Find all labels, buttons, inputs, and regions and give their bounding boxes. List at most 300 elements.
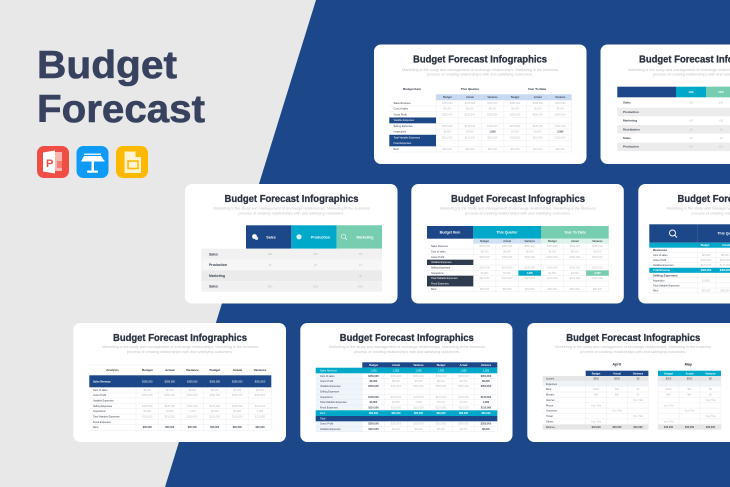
April table: Variance	[633, 372, 644, 375]
April table: Your Title	[612, 410, 623, 413]
May table: $80	[687, 394, 692, 397]
card 5 table: $480,000	[720, 269, 730, 272]
card 7 table: $8,000	[460, 380, 468, 383]
April table: Electric	[546, 394, 555, 397]
May table: Variance	[705, 372, 716, 375]
icon: PowerPoint: P	[46, 158, 53, 170]
card 7 table: $350,000	[368, 423, 379, 426]
card 6 table: $60,000	[143, 426, 152, 429]
card 2 table: +50	[689, 119, 694, 122]
card 7 table: $8,000	[392, 428, 400, 431]
card 8 description: process of creating relationships with and satisfying customers.	[580, 349, 686, 354]
May table: $40,000	[706, 426, 716, 429]
icon: sales	[252, 234, 258, 240]
card 1 table: $350,000	[532, 102, 544, 105]
card 6 table: $60,000	[188, 426, 197, 429]
card 3 table: Marketing	[357, 236, 373, 240]
panel: card 4 colored quarter table	[411, 184, 624, 304]
card 7 table: 1,555	[370, 369, 377, 372]
card 1 table: $350,000	[487, 113, 498, 116]
card 4 table: $350,000	[502, 256, 513, 259]
April table: $0	[637, 378, 640, 380]
card 1 table: Budget	[511, 96, 520, 99]
card 6 description	[102, 344, 258, 354]
card 1 table: $110,000	[533, 136, 543, 140]
card 1 table: $350,000	[442, 102, 453, 105]
card 5 table: $480,000	[701, 269, 712, 272]
card 1 table: Selling Expenses	[394, 125, 413, 128]
card 1 table: Budget	[443, 96, 452, 99]
card 1 table: Variable Expenses	[394, 119, 415, 122]
card 4 table: Fixed Expenses	[431, 282, 450, 286]
card 6 table: Gross Profit	[93, 394, 107, 397]
card 4 table: $60,000	[548, 288, 557, 291]
panel: card 1 quarter and year table	[374, 44, 586, 164]
card 6 table: $350,000	[187, 394, 198, 397]
card 7 table: $350,000	[436, 375, 447, 378]
card 4 table: $130,000	[524, 266, 536, 270]
card 5 table: Total Revenue	[653, 269, 671, 272]
card 4 table: Budget Item	[440, 231, 460, 235]
card 8 description	[555, 344, 711, 354]
card 6 description: Marketing is the study and management of exchange relationships. Marketing is the business	[102, 344, 258, 349]
card 6 table: $3,800	[143, 410, 152, 413]
card 1 table: $60,000	[533, 148, 543, 151]
card 3 description: process of creating relationships with and satisfying customers.	[238, 210, 344, 215]
card 7 table: Actual	[392, 364, 400, 367]
card 7 table: 1,555	[393, 369, 400, 372]
icon: production	[296, 234, 302, 239]
card 6 table: $350,000	[210, 394, 221, 397]
April table: $40,000	[633, 426, 643, 429]
card 3 table: 100	[358, 253, 363, 256]
card 7 table: $350,000	[436, 385, 447, 388]
card 4 table: $350,000	[479, 256, 490, 259]
card 7 table: $3,800	[392, 401, 400, 404]
panel: card 8 April and May tables	[527, 323, 730, 442]
card 3 table: 100	[268, 253, 273, 256]
card 7 table: $350,000	[368, 375, 379, 378]
card 1 table: $8,000	[534, 108, 542, 111]
card 7 table: $350,000	[436, 423, 447, 426]
card 7 table: Total Variable Expenses	[320, 401, 347, 404]
card 6 table: $8,000	[143, 389, 152, 392]
card 1 table: Cost of sales	[394, 108, 409, 111]
card 4 table: 2,080	[594, 272, 601, 275]
card 6 table: Actual	[165, 368, 175, 372]
card 3 table: 30%	[313, 286, 319, 288]
card 3 table: 15	[359, 264, 362, 267]
card 7 table: Rent	[320, 412, 326, 415]
panel: card 5 revenue table	[638, 184, 730, 304]
card 4 table: $350,000	[592, 245, 603, 248]
card 6 table: $60,000	[233, 426, 242, 429]
card 4 table: 1,805	[527, 272, 533, 275]
card 2 table: 15	[690, 128, 693, 131]
May table: $0	[709, 388, 712, 391]
April table: Income	[546, 378, 555, 380]
card 7 table: 2,080	[483, 401, 490, 404]
card 1 table: Variance	[555, 96, 566, 99]
card 1 table	[389, 87, 572, 152]
April table: Your Title	[591, 404, 602, 407]
April table: $80	[594, 394, 599, 397]
card 5 table: Selling Expenses	[653, 273, 678, 277]
card 3 table: Sales	[209, 284, 218, 288]
April table: April	[612, 362, 621, 366]
card 4 table: Gross Profit	[431, 256, 445, 259]
card 7 table: 1,555	[483, 369, 490, 372]
card 6 table	[89, 365, 271, 430]
card 2 table: 100	[719, 146, 724, 149]
card 4 table: Cost of sales	[431, 250, 446, 254]
card 7 table: Variance	[481, 364, 492, 367]
card 7 table: 1,555	[460, 369, 467, 372]
card 7 table: $110,000	[458, 407, 469, 410]
card 7 table: Variable Expenses	[320, 385, 341, 388]
May table: $500	[687, 378, 693, 380]
card 4 table: $130,000	[502, 266, 513, 270]
card 5 table	[649, 224, 730, 293]
April table: $500	[593, 378, 599, 380]
card 2 table: 10	[720, 137, 723, 140]
card 6 table: $350,000	[165, 394, 176, 397]
card 6 table: $60,000	[255, 426, 265, 429]
card 4 table: Rent	[431, 288, 437, 291]
card 1 table: $110,000	[465, 136, 476, 140]
card 5 table: Budget	[701, 244, 709, 247]
card 7 table: $110,000	[413, 407, 424, 410]
card 4 table: $110,000	[502, 277, 513, 280]
icon: PowerPoint	[37, 146, 69, 178]
card 3 table: 15	[269, 264, 272, 267]
April table: Expenses	[546, 383, 558, 386]
May table: $0	[709, 378, 712, 380]
card 1 table: $60,000	[465, 148, 475, 151]
card 7 table: Fixed Expenses	[320, 407, 339, 410]
card 2 table: Sales	[623, 101, 631, 105]
card 6 table: $8,000	[166, 389, 174, 392]
card 4 table: $3,800	[548, 272, 557, 275]
card 1 table: Sales Revenue	[394, 102, 411, 105]
card 7 table: $350,000	[413, 423, 424, 426]
card 7 table: $350,000	[458, 385, 469, 388]
card 1 table: Budget Item	[403, 87, 421, 91]
card 4 table: Selling Expenses	[431, 266, 451, 270]
card 1 table: $60,000	[488, 148, 498, 151]
card 6 table: $130,000	[165, 405, 176, 408]
card 1 description	[402, 67, 558, 77]
card 5 table: Actual	[722, 244, 730, 247]
card 1 table: $110,000	[510, 136, 521, 140]
panel: card 7 totals table	[300, 323, 512, 442]
card 4 table: $8,000	[481, 250, 489, 254]
card 1 table: $8,000	[556, 108, 565, 111]
card 7 table: $350,000	[391, 375, 402, 378]
card 7 table: $130,000	[413, 396, 424, 399]
April table: $500	[614, 378, 620, 380]
card 1 table: $110,000	[487, 136, 498, 140]
card 7 table: $60,000	[414, 412, 424, 415]
card 4 table: $110,000	[570, 277, 581, 280]
card 6 table: Variable Expenses	[93, 400, 114, 403]
card 4 table: $130,000	[570, 266, 581, 270]
card 2 table: Production	[623, 110, 639, 114]
card 7 table: $110,000	[368, 407, 379, 410]
card 1 table: $130,000	[487, 125, 498, 128]
April table: Your Title	[633, 399, 644, 402]
card 7 table: $3,800	[370, 401, 378, 404]
card 2 table: Sales	[623, 136, 631, 140]
April table: Balance	[546, 426, 556, 429]
card 4 table: $350,000	[502, 245, 513, 248]
card 6 table: $350,000	[255, 380, 266, 383]
card 2 table: 100	[719, 102, 724, 105]
card 3 table	[201, 225, 382, 292]
card 6 table: Rent	[93, 426, 99, 429]
card 8 heading: Budget Forecast Infographics	[566, 333, 700, 344]
card 1 table: $3,800	[511, 131, 520, 134]
card 4 table: $350,000	[547, 256, 558, 259]
card 7 table: 1,555	[415, 369, 422, 372]
card 3 heading: Budget Forecast Infographics	[224, 194, 359, 205]
card 4 table: Year To Date	[564, 231, 586, 235]
card 7 table: $8,000	[392, 380, 400, 383]
card 6 table: $350,000	[232, 394, 243, 397]
card 4 table: $3,800	[481, 272, 489, 275]
card 4 table: This Quarter	[496, 231, 518, 235]
card 1 table: Rent	[394, 148, 399, 151]
May table: $500	[666, 378, 672, 380]
card 1 table: $130,000	[510, 125, 521, 128]
card 1 table: $350,000	[487, 102, 498, 105]
card 6 table: $8,000	[256, 389, 264, 392]
card 6 table: $3,800	[211, 410, 219, 413]
card 5 description	[666, 206, 730, 215]
card 6 table: $3,800	[166, 410, 174, 413]
card 2 table: Production	[623, 145, 639, 149]
card 5 table: $8,000	[721, 254, 729, 257]
card 7 table: $350,000	[391, 385, 402, 388]
card 4 table: $8,000	[571, 250, 579, 254]
card 1 table: Year To Date	[528, 87, 547, 91]
card 5 table: $350,000	[701, 259, 712, 262]
card 7 table: Total	[320, 418, 326, 420]
card 1 table: $130,000	[532, 125, 544, 128]
April table: Actual	[613, 372, 621, 375]
card 1 table: $8,000	[466, 108, 474, 111]
card 1 table: $3,800	[534, 131, 542, 134]
May table: $40,000	[664, 426, 674, 429]
card 6 table: $130,000	[255, 405, 266, 408]
card 6 table: Selling Expenses	[93, 405, 113, 408]
card 7 table: $130,000	[458, 396, 469, 399]
card 1 table: $350,000	[555, 102, 566, 105]
card 7 table: $130,000	[481, 396, 492, 399]
card 1 table: $130,000	[555, 125, 566, 128]
card 4 table: $60,000	[480, 288, 490, 291]
card 4 table: $8,000	[503, 250, 512, 254]
card 4 table: Inspections	[431, 272, 444, 275]
card 7 table: Budget	[437, 364, 445, 367]
card 6 table: $8,000	[188, 389, 197, 392]
card 4 table: $60,000	[593, 288, 603, 291]
card 7 table: $350,000	[458, 423, 469, 426]
card 5 table: Revenues	[653, 248, 668, 252]
card 4 table: $350,000	[524, 245, 536, 248]
card 4 table: Variance	[525, 240, 535, 243]
card 7 table: $3,800	[437, 401, 445, 404]
April table: $80	[615, 388, 620, 391]
card 4 table: $8,000	[526, 250, 534, 254]
card 7 table: 1,805	[415, 401, 422, 404]
card 7 table: $350,000	[413, 375, 424, 378]
April table: $0	[637, 394, 640, 397]
card 4 table: $350,000	[524, 256, 536, 259]
card 7 table	[316, 362, 497, 432]
card 7 table: $8,000	[415, 428, 423, 431]
card 4 table: $60,000	[570, 288, 580, 291]
card 1 table: Inspections	[394, 131, 407, 134]
card 5 table: $130,000	[720, 264, 730, 267]
card 6 table: $350,000	[142, 380, 153, 383]
card 6 table: Inspections	[93, 410, 106, 413]
card 6 table: Cost of sales	[93, 389, 108, 392]
May table: Your Title	[663, 420, 674, 423]
card 7 table: 1,555	[438, 369, 445, 372]
April table: Your Title	[591, 420, 602, 423]
card 4 table: $350,000	[570, 256, 581, 259]
card 1 table: $350,000	[465, 102, 476, 105]
card 6 table: Variance	[254, 368, 267, 372]
card 1 table: $130,000	[465, 125, 476, 128]
card 7 table: Variable Expenses	[320, 428, 341, 431]
card 6 table: Fixed Expenses	[93, 421, 112, 424]
April table: $0	[637, 388, 640, 391]
card 6 table: Budget	[142, 368, 153, 372]
card 1 table: $60,000	[443, 148, 452, 151]
card 7 table: $130,000	[391, 396, 402, 399]
card 6 table: $130,000	[142, 405, 153, 408]
card 3 table: 100	[313, 253, 318, 256]
card 6 table: $130,000	[232, 405, 243, 408]
card 4 table: $60,000	[525, 288, 535, 291]
card 7 table: $110,000	[481, 407, 492, 410]
card 4 description: Marketing is the study and management of exchange relationships. Marketing is the business	[440, 206, 596, 210]
April table: Rent	[546, 388, 552, 391]
card 5 table: $3,800	[702, 279, 710, 282]
card 7 table: $350,000	[368, 385, 379, 388]
card 7 table: Gross Profit	[320, 380, 334, 383]
card 1 table: This Quarter	[461, 87, 480, 91]
card 6 table: $110,000	[142, 416, 153, 419]
April table: Phone	[546, 404, 554, 407]
card 4 table: Budget	[548, 240, 557, 243]
card 6 table: $110,000	[187, 416, 198, 419]
card 2 table: +50	[719, 119, 724, 122]
card 4 table: $8,000	[548, 250, 557, 254]
card 4 table: Variable Expenses	[431, 261, 452, 264]
card 4 table: $110,000	[547, 277, 558, 280]
card 5 table: $130,000	[701, 264, 712, 267]
card 3 description	[214, 206, 370, 215]
May table: $40,000	[685, 426, 695, 429]
card 1 table: $110,000	[442, 136, 453, 140]
card 5 table: Rent	[653, 290, 659, 293]
April table: Groceries	[546, 410, 558, 413]
card 5 table: $60,000	[720, 290, 730, 293]
main title: Budget	[37, 44, 177, 87]
card 5 table: Gross Profit	[653, 259, 667, 262]
card 6 table: $130,000	[187, 405, 198, 408]
card 4 table: Actual	[503, 240, 511, 243]
card 5 table: Inspection	[653, 279, 665, 282]
card 7 table: $8,000	[482, 428, 490, 431]
icon: magnifier	[670, 230, 677, 238]
card 7 heading: Budget Forecast Infographics	[340, 333, 474, 344]
April table: Budget	[592, 372, 601, 375]
card 5 table: Variable Expenses	[653, 264, 674, 267]
May table: $80	[666, 394, 671, 397]
card 4 table: $110,000	[592, 277, 603, 280]
card 1 table: $4,000	[466, 131, 474, 134]
card 1 table: Gross Profit	[394, 113, 407, 116]
card 7 table: $130,000	[368, 396, 379, 399]
card 4 table: $110,000	[525, 277, 535, 280]
card 1 table: $350,000	[555, 113, 566, 116]
April table: $40,000	[612, 426, 622, 429]
card 3 table: 15	[314, 264, 317, 267]
card 6 table: $350,000	[142, 394, 153, 397]
card 7 description	[329, 344, 485, 354]
card 4 description: process of creating relationships with and satisfying customers.	[465, 210, 571, 215]
card 7 description: process of creating relationships with and satisfying customers.	[354, 349, 460, 354]
card 4 heading: Budget Forecast Infographics	[451, 194, 585, 205]
card 6 table: Actual	[233, 368, 242, 372]
card 7 table: Budget	[369, 364, 378, 367]
card 6 table: $110,000	[165, 416, 176, 419]
card 4 table: Actual	[571, 240, 579, 243]
card 1 table: 2,080	[557, 131, 564, 134]
icon: Google Slides	[116, 146, 148, 178]
card 7 table: $8,000	[460, 428, 468, 431]
card 1 table: $110,000	[555, 136, 566, 140]
card 4 table: $130,000	[479, 266, 490, 270]
card 6 table: $3,800	[233, 410, 242, 413]
card 7 table: $8,000	[437, 428, 445, 431]
card 7 table: $350,000	[481, 375, 492, 378]
card 1 table: Actual	[534, 96, 542, 99]
card 4 table: $3,800	[571, 272, 579, 275]
card 7 table: $60,000	[481, 412, 491, 415]
May table: Your Title	[705, 415, 716, 418]
card 1 table: $8,000	[489, 108, 497, 111]
card 7 table: Inspections	[320, 396, 333, 399]
card 2 table: 10	[690, 137, 693, 140]
card 1 heading: Budget Forecast Infographics	[413, 55, 547, 66]
card 6 table: $350,000	[232, 380, 243, 383]
card 7 table: $350,000	[413, 385, 424, 388]
card 3 table: Sales	[266, 236, 276, 240]
card 4 table: $350,000	[547, 245, 558, 248]
May table: $0	[709, 394, 712, 397]
card 5 table: $60,000	[701, 290, 711, 293]
May table: Your Title	[705, 399, 716, 402]
April table	[543, 362, 648, 430]
card 3 table: Sales	[209, 252, 218, 256]
card 2 description	[628, 67, 730, 77]
card 7 table: $8,000	[482, 380, 490, 383]
